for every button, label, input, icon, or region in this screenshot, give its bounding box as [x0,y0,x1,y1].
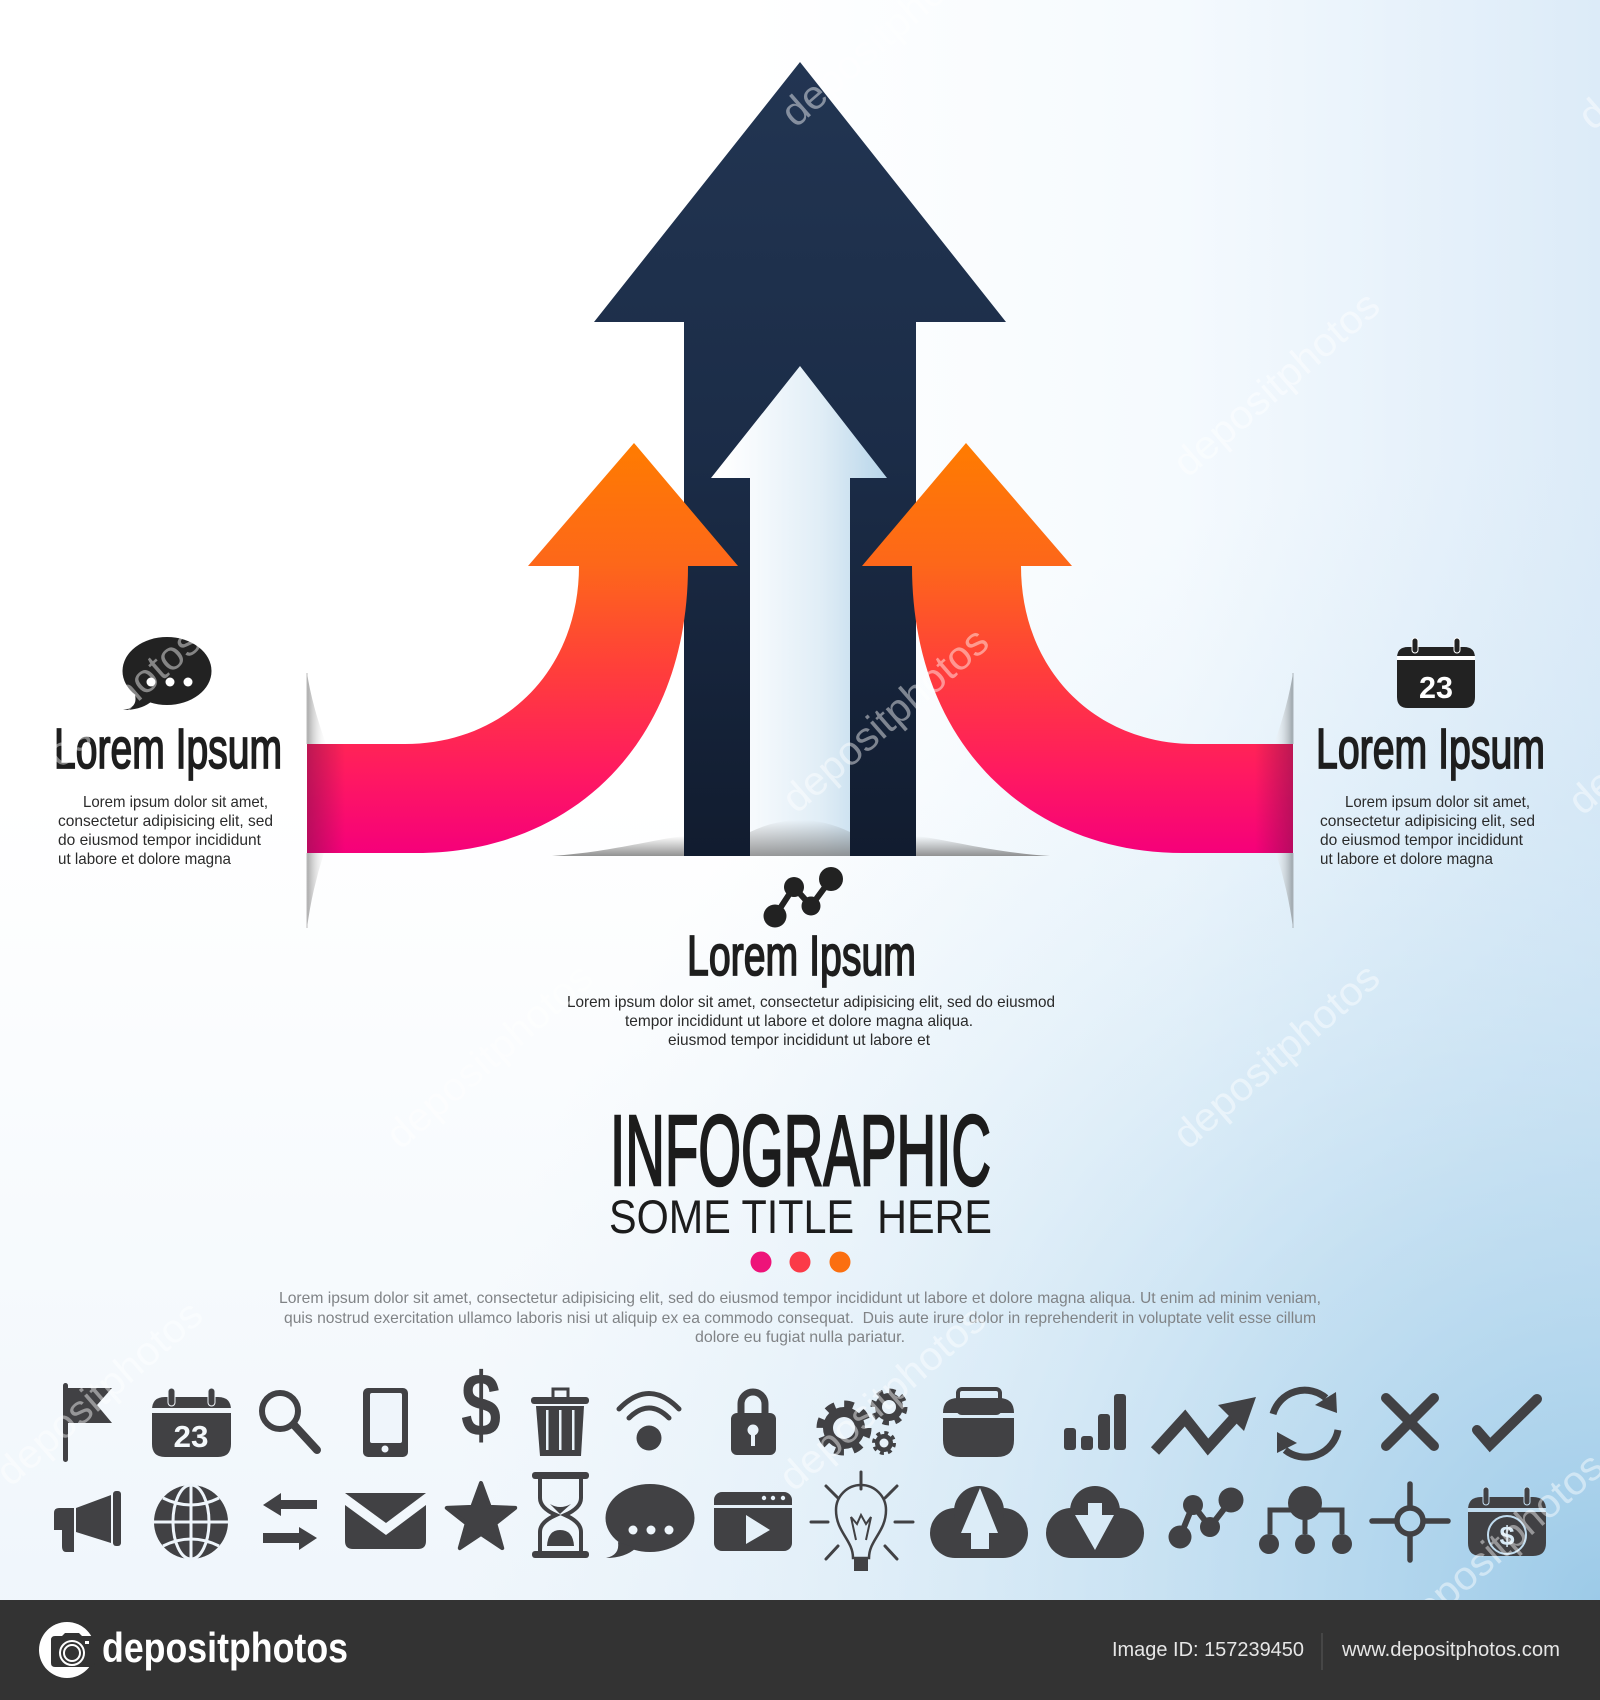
arrow: right orange-pink curved [862,443,1293,853]
watermark overlays: depositphotos [774,619,997,821]
paragraph: Lorem ipsum dolor sit amet, [1345,794,1530,811]
watermark overlays: depositphotos [378,955,601,1157]
icon grid [54,1356,1546,1571]
title: INFOGRAPHIC [610,1095,991,1207]
footer brand name: depositphotos [102,1624,348,1671]
icon: chat bubble [606,1484,694,1558]
paragraph [1320,794,1535,868]
icon: check [1477,1399,1537,1445]
shadow at foot of white arrow [750,820,850,856]
icon: calendar 23: 23 [174,1419,208,1454]
icon: cloud download [1046,1486,1144,1558]
icon: envelope [345,1493,426,1549]
footer logo badge [39,1622,95,1678]
watermark overlays: depositphotos [378,283,601,485]
icon: video player [714,1492,792,1551]
icon: calendar dollar: $ [1499,1521,1515,1551]
paragraph: Lorem ipsum dolor sit amet, [83,794,268,811]
icon: padlock [731,1392,776,1455]
arrow: large navy [594,62,1006,856]
icon: calendar 23 [152,1388,231,1457]
three colored dots [750,1252,850,1272]
icon: node chart [764,867,843,928]
icon: magnifier [262,1393,317,1450]
paragraph: eiusmod tempor incididunt ut labore et [668,1032,931,1049]
icon: refresh [1273,1390,1338,1457]
arrow: white center [711,366,887,856]
paper slit shadow: bottom of center arrows [552,836,1050,856]
arrow: left orange-pink curved [307,443,738,853]
icon: flag [63,1383,112,1462]
block: right label [1316,638,1545,868]
paragraph: ut labore et dolore magna [1320,851,1493,868]
icon: cross [1386,1398,1434,1446]
subtitle: SOME TITLE HERE [609,1190,992,1243]
icon: swap arrows [263,1493,317,1550]
icon: megaphone [54,1491,121,1552]
icon: wifi [619,1394,679,1450]
paper slit left [307,673,326,928]
paragraph: ut labore et dolore magna [58,851,231,868]
paragraph: Lorem ipsum dolor sit amet, consectetur adipisicing elit, sed do eiusmod [567,994,1055,1011]
heading: Lorem Ipsum [54,717,282,781]
icon: light bulb [811,1472,913,1571]
icon: bar signal [1064,1394,1126,1450]
icon: globe [154,1485,228,1559]
heading: Lorem Ipsum [687,924,916,988]
watermark overlays: depositphotos [1165,283,1388,485]
icon: dollar: $ [461,1356,501,1456]
footer bar [0,1600,1600,1700]
paper slit right [1274,673,1293,928]
watermark overlays: depositphotos [1165,955,1388,1157]
watermark overlays: depositphotos [771,1297,994,1499]
footer website: www.depositphotos.com [1341,1638,1560,1661]
icon: hierarchy [1259,1486,1352,1554]
description paragraph: dolore eu fugiat nulla pariatur. [695,1329,905,1346]
icon: trend arrow [1155,1397,1256,1451]
paragraph [58,794,273,868]
paragraph: tempor incididunt ut labore et dolore magna aliqua. [625,1013,973,1030]
icon: node chart small [1168,1488,1244,1548]
icon: gears [820,1391,905,1453]
paragraph: do eiusmod tempor incididunt [58,832,262,849]
icon: calendar: 23 [1419,670,1453,705]
paragraph [567,994,1055,1049]
icon: star [447,1483,515,1548]
paragraph: consectetur adipisicing elit, sed [58,813,273,830]
icon: speech bubble [122,637,212,710]
icon: hourglass [532,1472,589,1558]
block: center label [567,867,1055,1049]
icon: smartphone [363,1388,408,1457]
icon: trash [531,1389,589,1456]
footer image id: Image ID: 157239450 [1112,1638,1304,1661]
icon: cloud upload [930,1486,1028,1558]
paragraph: do eiusmod tempor incididunt [1320,832,1524,849]
icon: calendar dollar [1468,1487,1546,1556]
watermark overlays: depositphotos [1389,1444,1600,1646]
description paragraph: quis nostrud exercitation ullamco laboris nisi ut aliquip ex ea commodo consequat. Duis aute irure dolor in reprehenderit in voluptate velit esse cillum [284,1310,1316,1327]
block: left label [54,637,282,868]
paragraph: consectetur adipisicing elit, sed [1320,813,1535,830]
description paragraph: Lorem ipsum dolor sit amet, consectetur adipisicing elit, sed do eiusmod tempor incididunt ut labore et dolore magna aliqua. Ut enim ad minim veniam, [279,1290,1321,1307]
icon: briefcase [943,1389,1014,1457]
icon: calendar [1397,638,1475,708]
icon: crosshair [1372,1484,1448,1560]
description paragraph [279,1290,1321,1346]
